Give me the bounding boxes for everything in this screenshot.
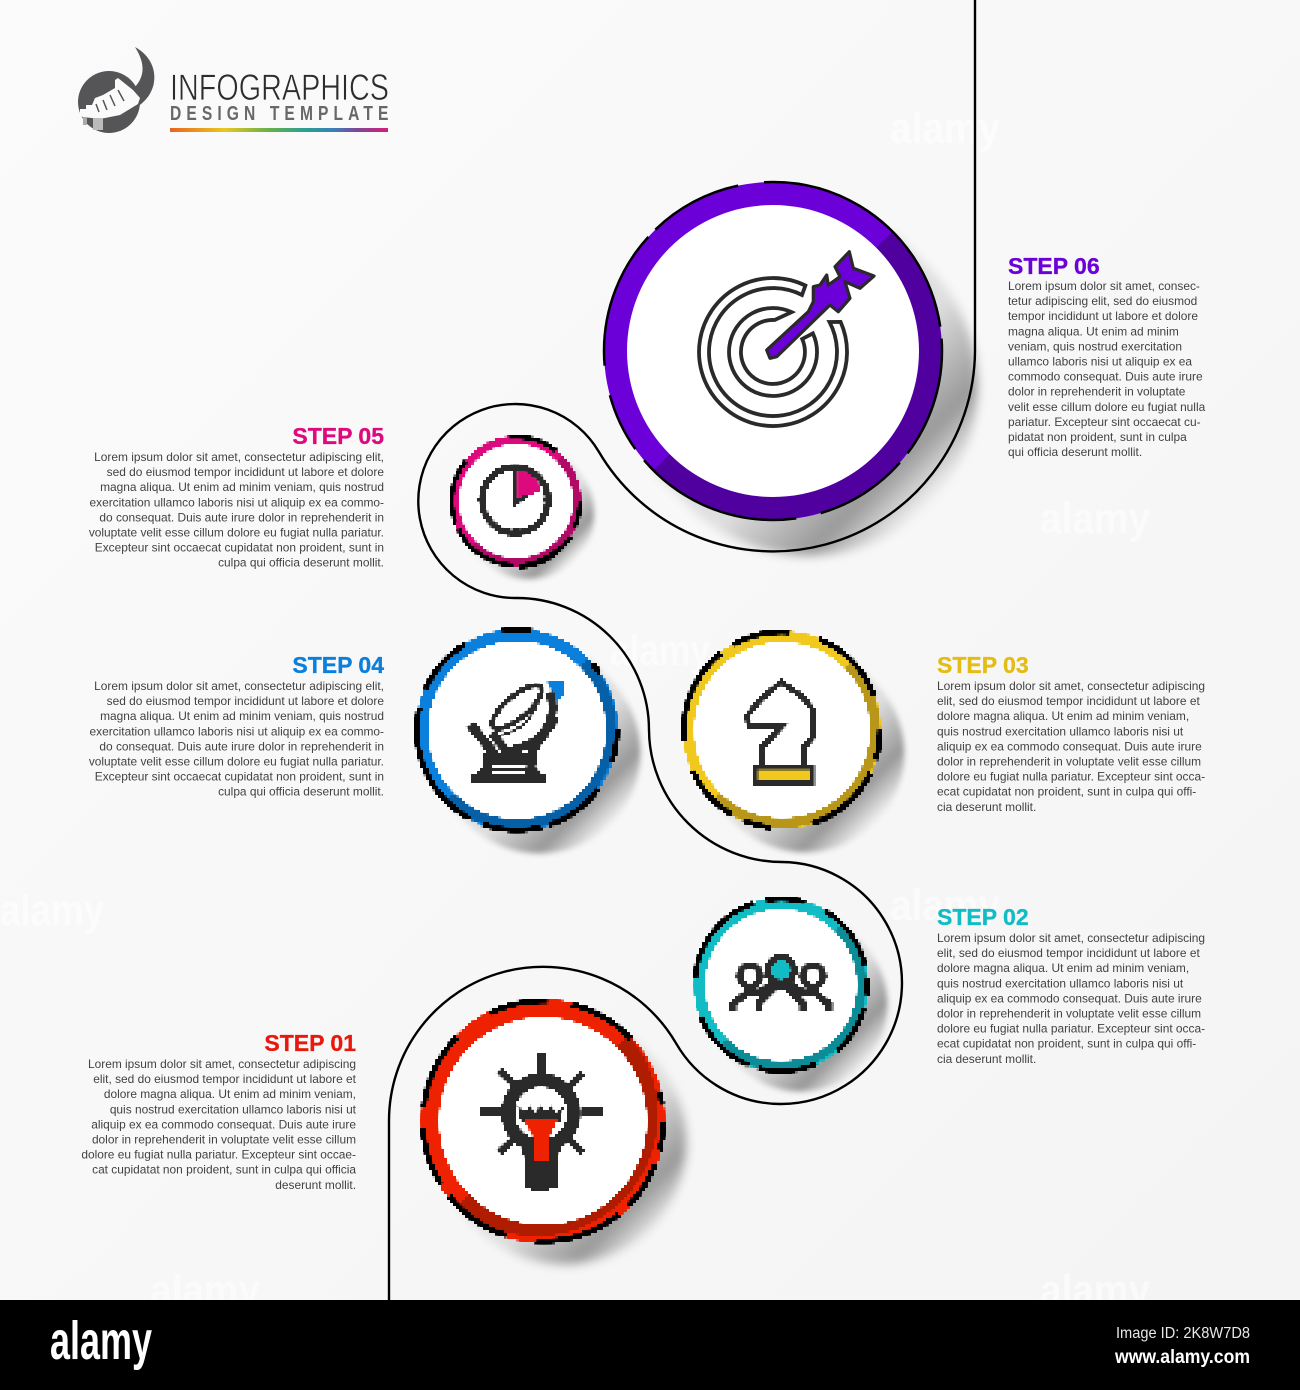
step 01 text: Lorem ipsum dolor sit amet, consectetur adipiscing	[88, 1057, 356, 1071]
long shadow	[446, 659, 640, 853]
step 05 text	[89, 423, 384, 570]
step 01 text: elit, sed do eiusmod tempor incididunt ut labore et	[93, 1072, 357, 1086]
icon: team	[733, 957, 829, 1012]
step 05 circle	[451, 436, 594, 579]
step 03 text: quis nostrud exercitation ullamco laboris nisi ut	[937, 724, 1184, 738]
logo	[72, 47, 389, 133]
step 06 text: tempor incididunt ut labore et dolore	[1008, 309, 1198, 323]
long shadow	[470, 455, 594, 579]
step 05 text: culpa qui officia deserunt mollit.	[218, 556, 384, 570]
long shadow	[720, 924, 888, 1092]
step 01 text: cat cupidatat non proident, sunt in culpa qui officia	[92, 1163, 356, 1177]
step 05 text: magna aliqua. Ut enim ad minim veniam, quis nostrud	[100, 480, 384, 494]
icon: light bulb	[480, 1053, 602, 1192]
step 04 text: Lorem ipsum dolor sit amet, consectetur adipiscing elit,	[94, 679, 384, 693]
step 02 text: dolor in reprehenderit in voluptate velit esse cillum	[937, 1006, 1201, 1020]
step 03 text: aliquip ex ea commodo consequat. Duis aute irure	[937, 739, 1202, 753]
step 05 heading: STEP 05	[292, 423, 384, 449]
step 01 text: dolore magna aliqua. Ut enim ad minim veniam,	[104, 1087, 356, 1101]
footer logo: alamy	[50, 1311, 152, 1371]
step 01 text: dolore eu fugiat nulla pariatur. Excepteur sint occae-	[81, 1148, 356, 1162]
rainbow bar	[170, 128, 388, 132]
step 06 text: pidatat non proident, sunt in culpa	[1008, 430, 1187, 444]
icon: satellite dish	[470, 679, 565, 782]
step 03 text	[937, 652, 1205, 814]
watermarks: alamy	[1040, 494, 1150, 543]
watermarks: alamy	[890, 881, 1000, 930]
step 03 text: elit, sed do eiusmod tempor incididunt ut labore et	[937, 694, 1200, 708]
footer bar	[0, 1300, 1300, 1390]
image id: Image ID: 2K8W7D8	[1116, 1325, 1250, 1342]
step 04 text: do consequat. Duis aute irure dolor in reprehenderit in	[99, 739, 384, 753]
step 02 text: dolore magna aliqua. Ut enim ad minim veniam,	[937, 961, 1189, 975]
ring	[421, 999, 665, 1243]
step 03 text: Lorem ipsum dolor sit amet, consectetur adipiscing	[937, 679, 1205, 693]
step 02 text: elit, sed do eiusmod tempor incididunt ut labore et	[937, 946, 1200, 960]
step 02 text: Lorem ipsum dolor sit amet, consectetur adipiscing	[937, 931, 1205, 945]
step 06 text: commodo consequat. Duis aute irure	[1008, 370, 1203, 384]
step 02 text: quis nostrud exercitation ullamco laboris nisi ut	[937, 976, 1184, 990]
step 05 text: Lorem ipsum dolor sit amet, consectetur adipiscing elit,	[94, 450, 384, 464]
step 01 text: aliquip ex ea commodo consequat. Duis aute irure	[91, 1117, 356, 1131]
step 04 text: sed do eiusmod tempor incididunt ut labore et dolore	[107, 694, 384, 708]
step 03 text: dolore magna aliqua. Ut enim ad minim veniam,	[937, 709, 1189, 723]
ring	[694, 898, 868, 1072]
step 04 circle	[416, 629, 640, 853]
watermarks: alamy	[890, 104, 1000, 153]
step 05 text: exercitation ullamco laboris nisi ut aliquip ex ea commo-	[90, 495, 384, 509]
watermarks: alamy	[0, 886, 104, 935]
step 05 text: voluptate velit esse cillum dolore eu fugiat nulla pariatur.	[89, 526, 384, 540]
step 02 text	[937, 904, 1205, 1066]
step 05 text: Excepteur sint occaecat cupidatat non proident, sunt in	[95, 541, 384, 555]
step 04 text: Excepteur sint occaecat cupidatat non proident, sunt in	[95, 770, 384, 784]
step 03 text: ecat cupidatat non proident, sunt in culpa qui offi-	[937, 785, 1196, 799]
ring	[683, 631, 881, 829]
step 02 text: cia deserunt mollit.	[937, 1052, 1036, 1066]
step 06 text: veniam, quis nostrud exercitation	[1008, 339, 1182, 353]
step 02 text: aliquip ex ea commodo consequat. Duis aute irure	[937, 991, 1202, 1005]
logo subtitle: DESIGN TEMPLATE	[170, 102, 388, 124]
step 01 circle	[421, 999, 686, 1264]
step 04 text: culpa qui officia deserunt mollit.	[218, 785, 384, 799]
step 05 text: do consequat. Duis aute irure dolor in reprehenderit in	[99, 510, 384, 524]
icon: target and arrow	[699, 252, 874, 426]
step 03 text: dolor in reprehenderit in voluptate velit esse cillum	[937, 754, 1201, 768]
icon: chess knight	[747, 682, 813, 783]
step 05 text: sed do eiusmod tempor incididunt ut labore et dolore	[107, 465, 384, 479]
step 06 text: magna aliqua. Ut enim ad minim	[1008, 324, 1179, 338]
step 04 text: magna aliqua. Ut enim ad minim veniam, quis nostrud	[100, 709, 384, 723]
logo title: INFOGRAPHICS	[170, 67, 389, 108]
watermarks	[0, 104, 1150, 1315]
step 03 heading: STEP 03	[937, 652, 1029, 678]
step 06 text: pariatur. Excepteur sint occaecat cu-	[1008, 415, 1201, 429]
logo icon	[72, 47, 154, 133]
step 04 text: voluptate velit esse cillum dolore eu fugiat nulla pariatur.	[89, 754, 384, 768]
step 02 circle	[694, 898, 888, 1092]
step 06 text: ullamco laboris nisi ut aliquip ex ea	[1008, 354, 1192, 368]
long shadow	[654, 232, 978, 556]
step 04 text: exercitation ullamco laboris nisi ut aliquip ex ea commo-	[90, 724, 384, 738]
step 06 circle	[604, 182, 978, 556]
step 06 text: Lorem ipsum dolor sit amet, consec-	[1008, 279, 1200, 293]
step 06 heading: STEP 06	[1008, 253, 1100, 279]
long shadow	[712, 660, 904, 852]
step 06 text: qui officia deserunt mollit.	[1008, 445, 1142, 459]
watermarks: alamy	[150, 1266, 260, 1315]
step 01 text: dolor in reprehenderit in voluptate velit esse cillum	[92, 1132, 356, 1146]
step 06 text	[1008, 253, 1206, 459]
icon: clock	[477, 465, 553, 538]
step 06 text: tetur adipiscing elit, sed do eiusmod	[1008, 294, 1197, 308]
step 03 text: dolore eu fugiat nulla pariatur. Excepteur sint occa-	[937, 770, 1205, 784]
step 03 circle	[683, 631, 904, 852]
connector curve	[389, 0, 975, 1300]
step 01 text	[81, 1030, 357, 1192]
step 06 text: dolor in reprehenderit in voluptate	[1008, 385, 1186, 399]
website: www.alamy.com	[1114, 1347, 1250, 1368]
ring	[451, 436, 581, 567]
watermarks: alamy	[610, 626, 710, 675]
step 01 heading: STEP 01	[264, 1030, 356, 1056]
step 06 text: velit esse cillum dolore eu fugiat nulla	[1008, 400, 1206, 414]
step 01 text: quis nostrud exercitation ullamco laboris nisi ut	[110, 1102, 357, 1116]
step 02 heading: STEP 02	[937, 904, 1029, 930]
long shadow	[457, 1035, 686, 1264]
step 01 text: deserunt mollit.	[275, 1178, 356, 1192]
step 04 heading: STEP 04	[292, 652, 384, 678]
step 02 text: ecat cupidatat non proident, sunt in culpa qui offi-	[937, 1037, 1196, 1051]
watermarks: alamy	[1040, 1266, 1150, 1315]
step 02 text: dolore eu fugiat nulla pariatur. Excepteur sint occa-	[937, 1022, 1205, 1036]
ring	[416, 629, 618, 831]
ring	[604, 182, 942, 520]
step 04 text	[89, 652, 384, 799]
step 03 text: cia deserunt mollit.	[937, 800, 1036, 814]
